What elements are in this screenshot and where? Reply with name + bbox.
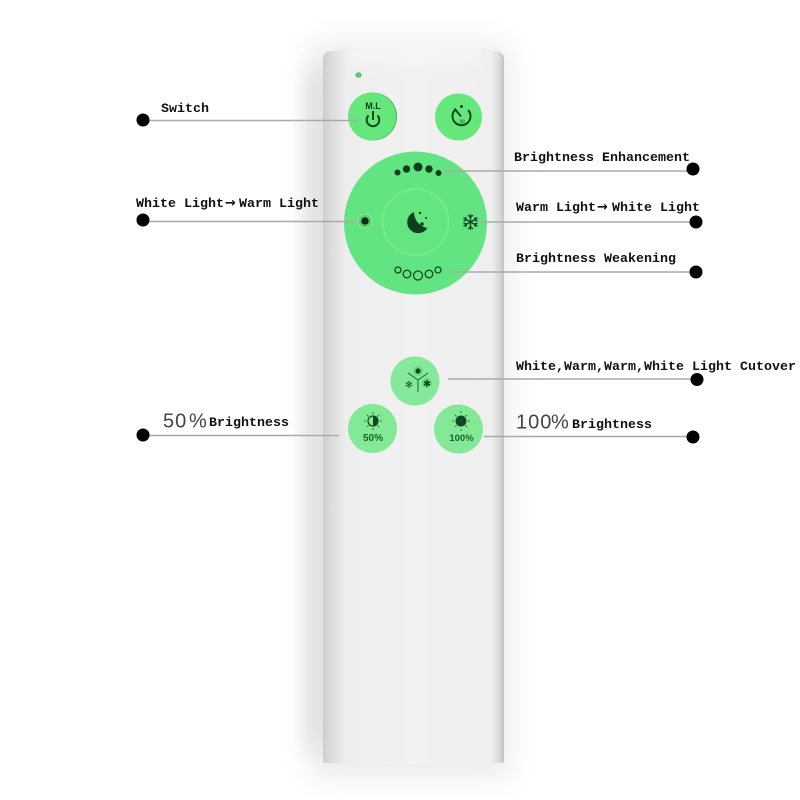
button: 100% brightness: 100%: [449, 433, 474, 444]
callout: 50% Brightness: %: [189, 410, 208, 432]
brightness down rings: [395, 267, 441, 280]
callout: White, Warm cutover: White,Warm,Warm,White Light Cutover: [516, 360, 796, 375]
warm light button: [358, 214, 372, 228]
centre night light button: [382, 189, 448, 255]
remote control body: [308, 42, 510, 778]
callout: White Light to Warm Light: White Light: [136, 197, 224, 212]
callout: 50% Brightness: [136, 410, 339, 442]
callout: White Light to Warm Light: [136, 196, 357, 226]
button: M.L power switch: M.L: [365, 101, 381, 111]
button: 100% brightness: [434, 404, 483, 454]
callout: 100% Brightness: Brightness: [572, 418, 652, 433]
white light snowflake button: [464, 214, 478, 230]
brightness up dots: [394, 162, 442, 176]
callout: Brightness Enhancement: [443, 151, 700, 176]
button: timer: 30: [459, 120, 465, 126]
callout: Warm Light to White Light: [478, 200, 702, 228]
callout: Brightness Weakening: [452, 252, 702, 278]
callout: Warm Light to White Light: →: [597, 200, 608, 215]
callout: Switch: Switch: [161, 102, 209, 117]
button: colour cutover: [390, 356, 440, 406]
callout: White Light to Warm Light: Warm Light: [239, 197, 319, 212]
callout: Brightness Enhancement: Brightness Enhancement: [514, 151, 690, 166]
callout: Brightness Weakening: Brightness Weakening: [516, 252, 676, 267]
callout: 100% Brightness: %: [551, 412, 570, 434]
callout: Switch: [136, 102, 358, 126]
callout: 100% Brightness: 100: [516, 412, 552, 434]
circular control pad: [344, 152, 487, 294]
callout: Warm Light to White Light: White Light: [612, 201, 700, 216]
button: colour cutover: ❄: [405, 380, 413, 391]
button: 50% brightness: 50%: [363, 433, 383, 444]
button: M.L power switch: [348, 92, 397, 140]
button: timer: [435, 94, 482, 140]
button: colour cutover: ✱: [423, 379, 431, 390]
button: 50% brightness: [348, 404, 397, 453]
callout: White Light to Warm Light: →: [225, 196, 236, 211]
callout: 50% Brightness: 50: [163, 410, 187, 432]
callout: Warm Light to White Light: Warm Light: [516, 201, 596, 216]
callout: 50% Brightness: Brightness: [209, 416, 289, 431]
callout: White, Warm cutover: [448, 360, 796, 386]
callout: 100% Brightness: [484, 412, 700, 444]
indicator LED: [355, 72, 362, 78]
